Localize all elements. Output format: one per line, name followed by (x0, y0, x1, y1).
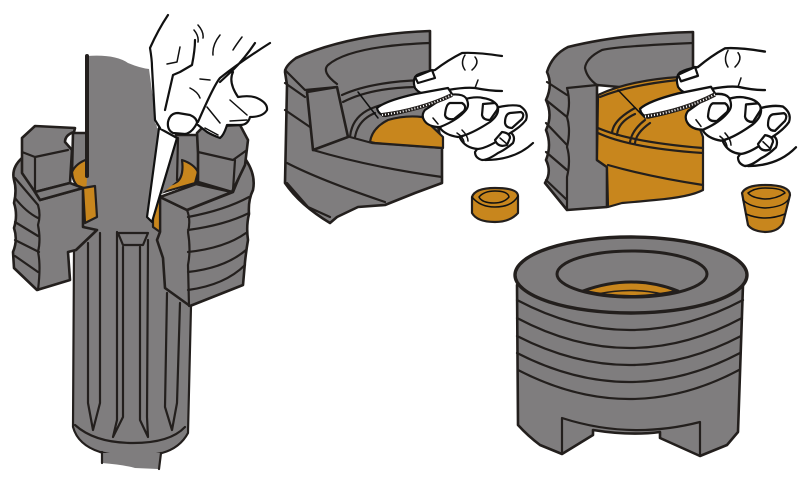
small orange cup (742, 185, 790, 232)
top face ellipse (515, 237, 747, 313)
hand with coin (640, 48, 796, 166)
figure: cross-section with sleeve fitted (545, 32, 796, 232)
gray housing rim (545, 32, 693, 210)
orange ring behind rod (72, 159, 198, 194)
side rib lines (546, 82, 597, 210)
foot notch (562, 418, 700, 456)
figure: complete threaded ring seen from above (515, 237, 747, 456)
right collar section (157, 160, 254, 306)
gray housing (285, 31, 442, 223)
hand with coin (377, 53, 533, 160)
small orange cap (472, 188, 518, 222)
figure: cross-section with coin and pressed cap (285, 31, 533, 223)
centre rod and stem (73, 56, 191, 469)
thread lines (517, 300, 743, 399)
hole (557, 251, 707, 297)
figure: cutaway fitting with tool being inserted (13, 15, 270, 469)
orange sleeve (597, 77, 703, 207)
inner ledge (585, 43, 693, 85)
collar lug left (22, 126, 75, 192)
left collar section (13, 158, 97, 290)
ring body (517, 285, 743, 456)
tool blade (147, 128, 177, 222)
orange sleeve seen through hole (583, 282, 678, 296)
back ring pieces (72, 133, 199, 182)
housing inner rim lines (285, 43, 442, 217)
top faces of cut collar (35, 183, 232, 210)
collar lug right (197, 125, 248, 192)
orange sleeve cut strips (83, 186, 160, 232)
orange disc (370, 116, 443, 148)
hand holding tool (150, 15, 270, 138)
